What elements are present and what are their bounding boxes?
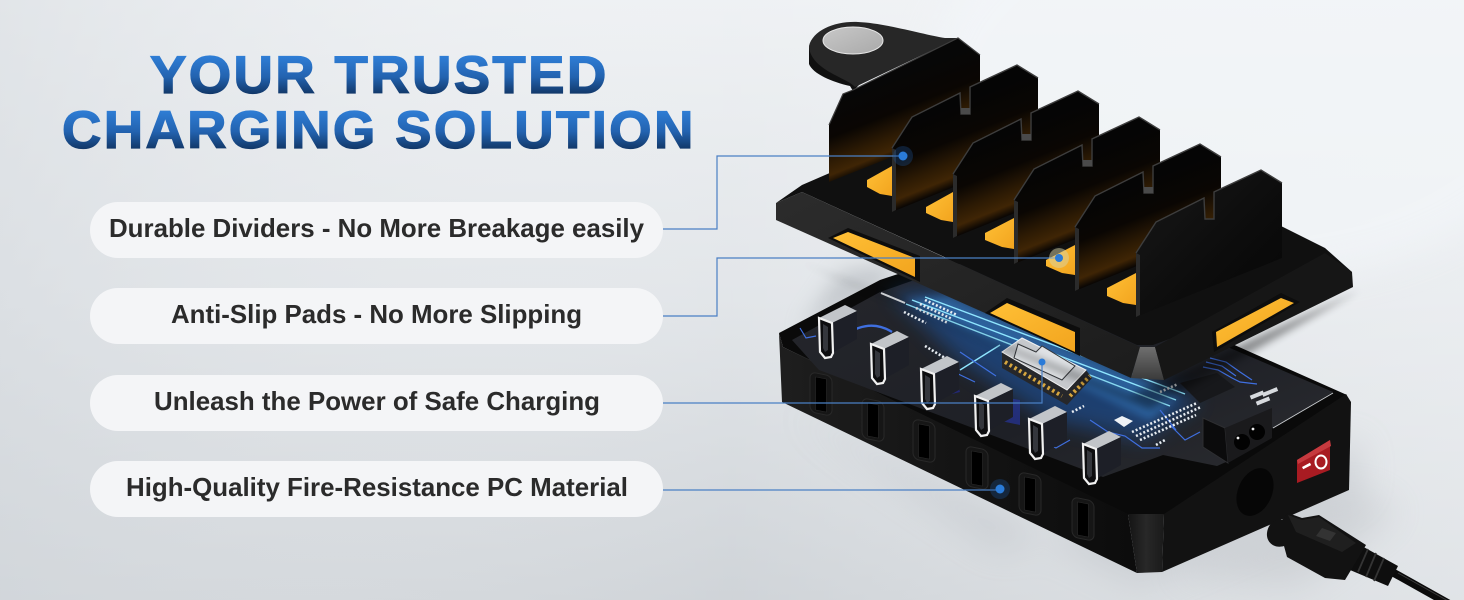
title: CHARGING SOLUTION — [62, 101, 693, 160]
top pad 5 — [1107, 273, 1136, 305]
side pad right — [1212, 293, 1300, 352]
base right side — [1162, 394, 1351, 572]
callout line: material — [663, 479, 1010, 499]
plate front-right slab — [1155, 253, 1353, 380]
title: YOUR TRUSTED — [150, 46, 606, 105]
feature pill: durable dividers — [90, 202, 663, 258]
feature pill: anti-slip pads — [90, 288, 663, 344]
callout line: dividers — [663, 146, 913, 229]
top pad 3 — [985, 218, 1014, 249]
plate front-left slab — [776, 192, 1140, 378]
usb ports — [819, 305, 1121, 484]
top pad 2 — [926, 192, 953, 222]
ac socket slots on front side — [810, 372, 1094, 541]
side pad left — [828, 228, 920, 282]
plate corner — [1131, 347, 1164, 380]
feature pill: fire-resistant material — [90, 461, 663, 517]
base top face — [779, 240, 1347, 515]
divider 4 — [1014, 117, 1160, 264]
top plate with anti-slip pads — [776, 22, 1360, 410]
divider 2 — [892, 65, 1038, 212]
divider 5 — [1075, 144, 1221, 291]
base unit: charging station body — [779, 240, 1351, 573]
plate top surface — [776, 98, 1352, 345]
feature pill: anti-slip pads: Anti-Slip Pads - No More Slipping — [171, 299, 582, 329]
power cord — [1267, 513, 1460, 600]
cable port — [1229, 462, 1281, 522]
side pad center — [985, 298, 1080, 356]
title — [62, 46, 693, 160]
main chip — [1002, 338, 1092, 405]
power inlet — [1203, 408, 1272, 463]
feature pill: fire-resistant material: High-Quality Fire-Resistance PC Material — [126, 472, 628, 502]
feature pill: safe charging — [90, 375, 663, 431]
callout line: pads — [663, 248, 1069, 316]
circuit board — [792, 250, 1333, 477]
power switch — [1297, 440, 1331, 483]
callout line: safe charging — [663, 358, 1046, 403]
feature pill: safe charging: Unleash the Power of Safe Charging — [154, 386, 600, 416]
base corner — [1128, 514, 1164, 573]
base front side — [779, 333, 1137, 573]
feature pill: durable dividers: Durable Dividers - No More Breakage easily — [109, 213, 645, 243]
divider 6 — [1136, 170, 1282, 317]
first divider with handle — [809, 22, 980, 182]
top pad 4 — [1046, 245, 1075, 275]
top pad 1 — [867, 166, 892, 196]
divider 3 — [953, 91, 1099, 238]
